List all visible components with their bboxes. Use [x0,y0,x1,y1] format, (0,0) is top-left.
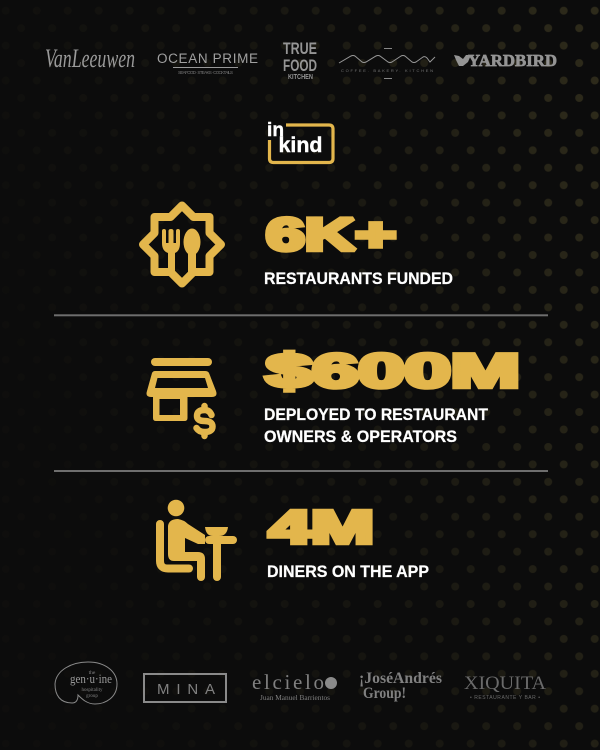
logo: Ocean Prime: OCEAN PRIME [157,51,258,66]
logo: José Andrés Group [359,670,442,702]
logo: The Genuine Hospitality Group: the [89,670,96,676]
logo: Mina [144,674,226,702]
top logo row [45,40,557,81]
icon: storefront with dollar [146,358,216,436]
logo: José Andrés Group: Group! [363,685,406,702]
logo: Xiquita: • RESTAURANTE Y BAR • [470,695,540,701]
bottom logo row [55,662,546,704]
logo: The Genuine Hospitality Group [55,662,117,704]
logo: El Cielo [252,670,337,702]
stat number: $600M: $600M [266,344,520,397]
logo: The Genuine Hospitality Group: hospitality [81,688,103,693]
logo: The Genuine Hospitality Group: group [86,694,98,699]
logo: Mina: MINA [157,681,215,698]
stat: deployed [146,344,520,446]
logo: Xiquita: XIQUITA [464,673,546,694]
stat number: 4M: 4M [269,501,374,553]
logo: Van Leeuwen: VanLeeuwen [45,44,135,73]
stat: diners [160,500,429,581]
logo: True Food Kitchen: FOOD [283,57,317,75]
stat: restaurants funded [143,206,453,288]
logo: True Food Kitchen: TRUE [283,40,317,58]
logo: José Andrés Group: ¡JoséAndrés [359,670,442,687]
logo: Ocean Prime [157,51,258,75]
logo: Yardbird: YARDBIRD [468,51,557,70]
inKind logo [267,120,333,162]
logo: Ocean Prime: SEAFOOD · STEAKS · COCKTAILS [178,70,233,75]
logo: Maman: COFFEE. BAKERY. KITCHEN [341,68,433,73]
logo: Maman [339,48,435,79]
stat label: deployed to restaurant owners and operators: OWNERS & OPERATORS [264,427,457,446]
stat label: deployed to restaurant owners and operators: DEPLOYED TO RESTAURANT [264,405,489,424]
inKind logo: in [267,120,284,141]
icon: diner at table [160,500,237,581]
stat label: diners on the app: DINERS ON THE APP [267,562,429,581]
stat label: restaurants funded: RESTAURANTS FUNDED [264,269,453,288]
inKind logo: kind [278,134,322,157]
logo: True Food Kitchen [283,40,317,81]
logo: True Food Kitchen: KITCHEN [288,74,313,81]
logo: El Cielo: elcielo [252,670,324,694]
logo: El Cielo: Juan Manuel Barrientos [260,694,330,702]
stat number: 6K+: 6K+ [266,209,396,260]
stat label: deployed to restaurant owners and operators [264,405,489,446]
icon: fork and spoon in star [143,206,221,284]
logo: The Genuine Hospitality Group: gen·u·ine [70,671,112,686]
